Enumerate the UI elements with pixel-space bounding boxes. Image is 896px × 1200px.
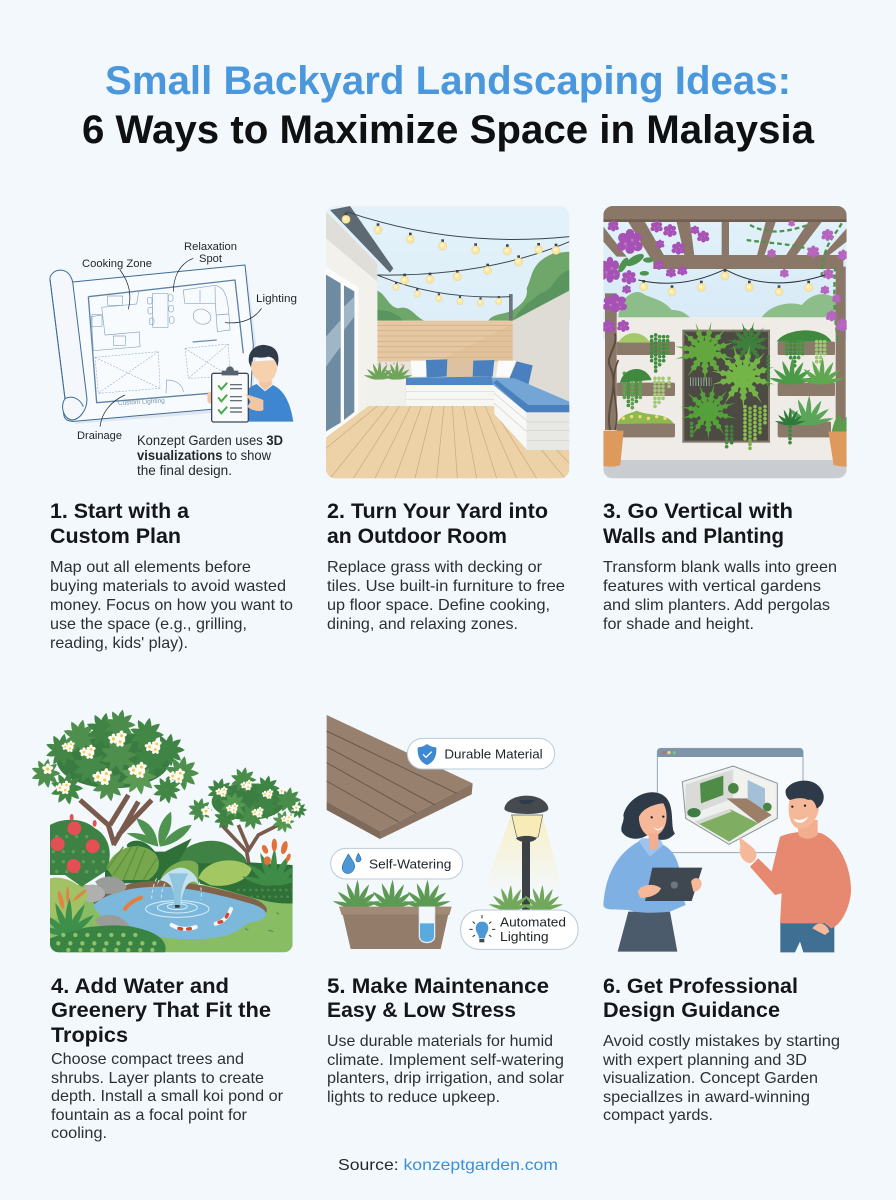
body text 6: Avoid costly mistakes by starting [603,1033,840,1050]
pill: automated lighting: Automated [500,915,566,929]
big tree [31,709,199,845]
woman [603,792,702,952]
icon: water drops [342,853,361,873]
label: relaxation spot: Relaxation [184,241,237,253]
pots [603,431,624,467]
body text 6: visualization. Concept Garden [603,1070,818,1087]
body text 6: speciallzes in award-winning [603,1089,810,1106]
icon: solar lamp and glow [483,796,563,910]
body text 4: depth. Install a small koi pond or [51,1088,283,1105]
icon: self-watering planter [332,880,452,949]
body text 5: planters, drip irrigation, and solar [327,1070,564,1087]
body text 6 [602,1033,840,1124]
body text 4: fountain as a focal point for [51,1107,247,1124]
body text 4: cooling. [51,1125,107,1142]
body text 2: dining, and relaxing zones. [327,616,518,633]
icon: decking boards [327,715,473,839]
icon: man with clipboard [207,345,293,422]
bougainvillea left [600,220,709,333]
heading 3 [603,500,793,548]
body text 1: reading, kids' play). [50,635,188,652]
body text 5: lights to reduce upkeep. [327,1089,500,1106]
bougainvillea right [747,223,842,340]
caption: 3D visualizations [137,433,283,478]
pill: automated lighting: Lighting [500,930,549,944]
heading 4 [51,975,271,1047]
orange flowering plants [242,838,293,886]
fountain [152,868,201,908]
browser window [657,748,803,853]
body text 3: and slim planters. Add pergolas [603,597,830,614]
panel: 5 low-maintenance illustration [327,715,578,949]
body text 2 [327,559,565,633]
garden base and lawn [36,812,305,952]
source footer: Source: konzeptgarden.com [338,1157,558,1174]
label: lighting: Lighting [256,293,297,305]
wood fence [377,321,513,362]
body text 4 [51,1051,283,1142]
body text 1: money. Focus on how you want to [50,597,293,614]
pill: self-watering [331,848,463,879]
big leaf plant [127,812,192,847]
house wall [326,212,378,414]
caption: 3D visualizations: visualizations to show [137,448,271,463]
title [82,59,815,152]
icon: blueprint plan [50,258,262,427]
pill: self-watering: Self-Watering [369,857,451,871]
sky [327,206,570,450]
heading 2 [327,500,548,548]
heading 2: 2. Turn Your Yard into [327,500,548,523]
heading 4: Tropics [51,1024,128,1047]
panel: 1 custom plan illustration [50,241,297,478]
green wall frame [683,331,769,442]
body text 2: tiles. Use built-in furniture to free [327,578,565,595]
heading 4: Greenery That Fit the [51,999,271,1022]
title: Small Backyard Landscaping Ideas: [105,59,791,103]
ferns [674,321,776,452]
string lights [638,269,825,283]
heading 1 [50,500,189,548]
body text 1: Map out all elements before [50,559,251,576]
heading 6 [603,975,798,1022]
hibiscus bush [50,820,110,887]
wall planters left [617,333,675,437]
label: relaxation spot [184,241,237,265]
body text 3: for shade and height. [603,616,754,633]
heading 6: 6. Get Professional [603,975,798,998]
body text 6: compact yards. [603,1107,713,1124]
heading 5: 5. Make Maintenance [327,975,549,998]
body text 3 [603,559,837,633]
heading 1: 1. Start with a [50,500,189,523]
bench seat [406,377,493,385]
sky [604,222,846,340]
body text 2: Replace grass with decking or [327,559,542,576]
body text 1: buying materials to avoid wasted [50,578,286,595]
small plan caption: Custom Lighting [118,398,165,407]
heading 1: Custom Plan [50,525,181,548]
koi fish [125,898,231,929]
heading 6: Design Guidance [603,999,780,1022]
small tree [188,767,307,865]
pergola [603,206,847,430]
pillows [411,359,533,385]
body text 1 [50,559,293,652]
panel: 3 vertical garden illustration [600,206,849,478]
body text 4: shrubs. Layer plants to create [51,1070,264,1087]
body text 5: climate. Implement self-watering [327,1052,564,1069]
caption: 3D visualizations: Konzept Garden uses 3D [137,433,283,448]
label: drainage: Drainage [77,430,122,442]
panel: 6 professional guidance illustration [603,748,851,952]
man [739,781,851,952]
foreground plants [36,878,279,952]
grass around lamp [488,885,563,912]
body text 5: Use durable materials for humid [327,1033,553,1050]
floor [603,460,847,478]
pill: durable material: Durable Material [444,747,543,761]
body text 5 [327,1033,564,1106]
post [509,294,513,321]
pond [93,880,267,913]
side wall [513,291,569,405]
body text 2: up floor space. Define cooking, [327,597,550,614]
body text 3: Transform blank walls into green [603,559,837,576]
heading 4: 4. Add Water and [51,975,229,998]
heading 3: 3. Go Vertical with [603,500,793,523]
string lights [347,212,569,297]
heading 5: Easy & Low Stress [327,999,516,1022]
wall behind bench [377,362,513,407]
deck floor [326,406,569,478]
pill: automated lighting [461,910,578,949]
hedges [377,252,569,321]
3D garden model [682,766,777,844]
planter [377,380,406,406]
icon: shield [418,744,436,765]
label: relaxation spot: Spot [199,253,222,265]
heading 5 [327,975,549,1022]
hedge behind pond [105,862,293,903]
caption: 3D visualizations: the final design. [137,463,232,478]
heading 2: an Outdoor Room [327,525,507,548]
sliding door [326,267,358,437]
body text 6: with expert planning and 3D [602,1052,807,1069]
label: cooking zone: Cooking Zone [82,258,152,270]
hedges [618,292,838,317]
middle shrubs [178,840,246,864]
wall [615,317,837,461]
bench cushion back [447,361,474,377]
panel: 2 outdoor room illustration [326,206,569,478]
icon: light bulb [469,915,495,942]
body text 3: features with vertical gardens [603,578,821,595]
pill: durable material [407,738,555,769]
rocks [82,876,130,927]
body text 4: Choose compact trees and [51,1051,244,1068]
heading 3: Walls and Planting [603,525,784,548]
panel: 4 tropical garden illustration [31,709,307,952]
body text 1: use the space (e.g., grilling, [50,616,247,633]
roof [330,206,393,273]
wall planters right [768,330,845,447]
title: 6 Ways to Maximize Space in Malaysia [82,108,815,152]
